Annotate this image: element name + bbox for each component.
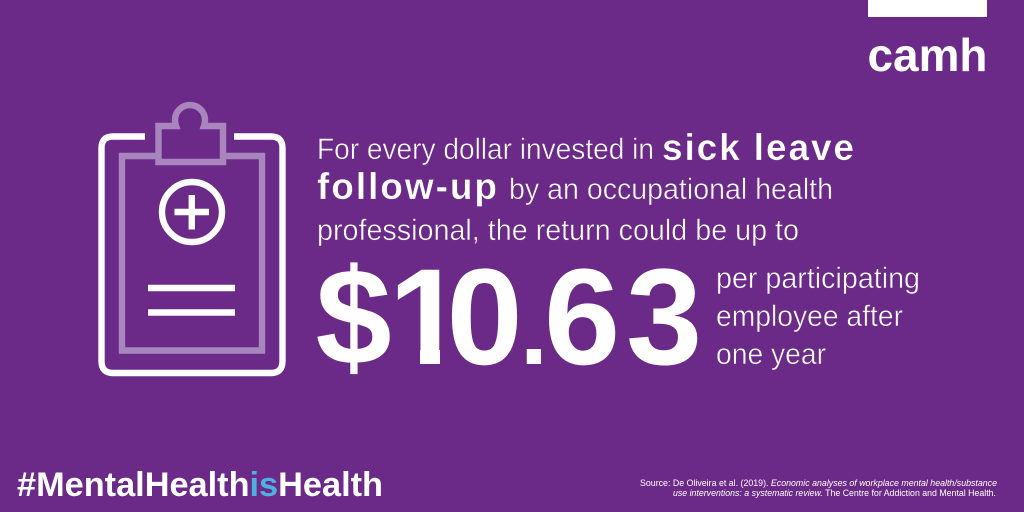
big number: $10.63: $1	[316, 241, 465, 394]
big number: $10.63: .	[520, 274, 548, 386]
big number: $10.63	[316, 241, 702, 394]
main statement text: For every dollar invested in	[317, 133, 654, 166]
per-employee text: per participating	[716, 262, 920, 295]
logo: camh: camh	[868, 29, 988, 81]
per-employee text: employee after	[716, 300, 903, 333]
source note: use interventions: a systematic review. The Centre for Addiction and Mental Health.	[673, 488, 996, 498]
main statement text	[317, 127, 854, 247]
big number: $10.63: 6	[544, 241, 620, 394]
main statement text: by an occupational health	[509, 173, 833, 206]
big number: $10.63: 3	[626, 241, 702, 394]
big number: $10.63: 0	[446, 241, 523, 394]
per-employee text: one year	[716, 338, 826, 371]
logo: camh	[868, 0, 988, 81]
source note	[640, 478, 997, 498]
main statement text: follow-up	[317, 166, 497, 207]
per-employee text	[716, 262, 920, 371]
main statement text: professional, the return could be up to	[317, 214, 799, 247]
main statement text: sick leave	[662, 127, 854, 168]
icon: medical clipboard	[102, 105, 282, 373]
source note: Source: De Oliveira et al. (2019). Economic analyses of workplace mental health/substance	[640, 478, 997, 488]
hashtag: #MentalHealthisHealth	[17, 466, 383, 504]
